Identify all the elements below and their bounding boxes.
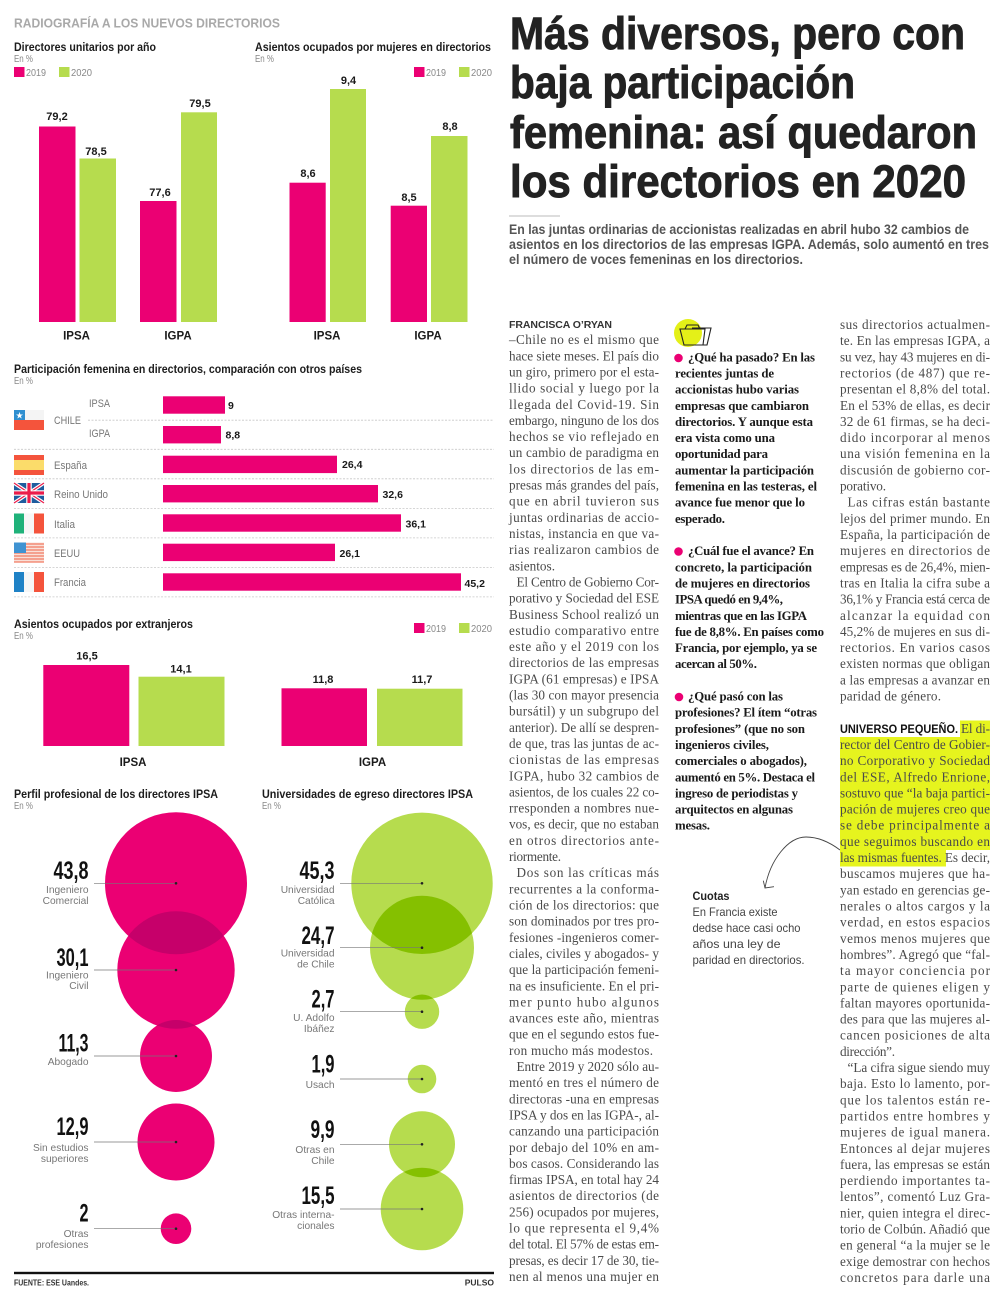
- deck: [509, 222, 989, 267]
- article column 1: asientos, de los cuales 22 co-: [509, 784, 659, 799]
- article column 1: riormente.: [509, 849, 561, 864]
- article column 1: directoras -una en empresas: [509, 1091, 659, 1106]
- value labels: 2: [80, 1200, 88, 1228]
- bar chart: 11,8: [313, 674, 333, 686]
- question: qué ha pasado: ¿Qué ha pasado? En las: [688, 350, 815, 364]
- question: qué ha pasado: era vista como una: [675, 431, 776, 445]
- country labels: Reino Unido: [54, 489, 108, 501]
- flag: Reino Unido: [14, 483, 44, 503]
- value labels: Ingeniero: [46, 970, 89, 982]
- article column 3: cancen posiciones de alta: [840, 1028, 990, 1043]
- article column 1: que la participación femeni-: [509, 962, 659, 977]
- article column 1: presas más grandes del país,: [509, 478, 659, 492]
- bar chart: IGPA: [164, 330, 192, 342]
- article column 3: dido incorporar al menos: [840, 430, 990, 445]
- article column 1: recurrentes a la conforma-: [509, 881, 659, 896]
- article column 3: concretos para darle una: [840, 1270, 990, 1285]
- article column 3: tras en Italia la cifra sube a: [840, 575, 990, 590]
- unit: En %: [262, 801, 281, 812]
- article column 1: firmas IPSA, en total hay 24: [509, 1172, 659, 1187]
- article column 3: alcanzar la equidad con: [840, 608, 990, 623]
- question: qué pasó con las profesiones: ingreso de periodistas y: [675, 786, 799, 800]
- legend: 2019: [426, 67, 446, 79]
- article column 3: rector del Centro de Gobier-: [840, 737, 990, 752]
- article column 3: España, la participación de: [840, 527, 990, 542]
- article column 3: te. En las empresas IGPA, a: [840, 333, 990, 348]
- section heading: Radiografía: RADIOGRAFÍA A LOS NUEVOS DIRECTORIOS: [14, 16, 280, 30]
- question: cuál fue el avance: mientras que en las IGPA: [675, 609, 808, 623]
- legend: 2020: [71, 67, 92, 79]
- article column 1: nen al menos una mujer en: [509, 1269, 659, 1284]
- question: qué ha pasado: femenina en las testeras, el: [675, 480, 817, 494]
- article column 3: del ESE, Alfredo Enrione,: [840, 769, 990, 784]
- callout: cuotas: paridad en directorios.: [692, 953, 804, 967]
- article column 1: anterior). De allí se despren-: [509, 720, 659, 735]
- value labels: Otras interna-: [272, 1210, 334, 1221]
- article column 3: mujeres en directorios de: [840, 543, 990, 558]
- heading: Asientos ocupados por extranjeros: [14, 617, 193, 631]
- article column 1: presas, es decir 17 de 30, tie-: [509, 1253, 659, 1268]
- value labels: Otras en: [295, 1145, 334, 1156]
- value labels: Universidad: [281, 885, 335, 896]
- question: qué ha pasado: esperado.: [675, 512, 725, 526]
- panel: asientos ocupados por extranjeros: [14, 617, 492, 769]
- bar chart: IGPA: [359, 757, 386, 769]
- article column 1: mer punto hubo algunos: [509, 994, 659, 1009]
- bar chart: 8,8: [442, 121, 458, 133]
- article column 1: del total. El 57% de estas em-: [509, 1237, 659, 1252]
- country labels: EEUU: [54, 548, 80, 560]
- unit: En %: [14, 801, 33, 812]
- article column 1: (las 30 con mayor presencia: [509, 688, 659, 702]
- article column 1: 256) ocupados por mujeres,: [509, 1204, 659, 1219]
- value labels: [272, 857, 335, 1232]
- article column 1: hace siete meses. El país dio: [509, 348, 659, 363]
- deck: En las juntas ordinarias de accionistas realizadas en abril hubo 32 cambios de: [509, 222, 969, 237]
- title: [510, 8, 977, 207]
- source footer: FUENTE: ESE Uandes.: [14, 1278, 89, 1288]
- value labels: Civil: [69, 981, 88, 992]
- article column 3: dirección”.: [840, 1044, 895, 1059]
- article column 1: que en abril tuvieron sus: [509, 494, 659, 509]
- value labels: Universidad: [281, 948, 335, 960]
- horizontal bars: 9: [228, 400, 234, 412]
- article column 1: un giro, primero por el esta-: [509, 364, 659, 380]
- value labels: U. Adolfo: [293, 1013, 335, 1024]
- unit: En %: [14, 631, 33, 642]
- article column 1: lo que representa el 9,4%: [509, 1221, 659, 1236]
- legend: 2020: [471, 623, 492, 635]
- article column 3: fuera, las empresas se están: [840, 1157, 990, 1172]
- bar chart: 11,7: [412, 674, 432, 686]
- article column 1: que en el segundo estos fue-: [509, 1027, 659, 1042]
- article column 1: Business School realizó un: [509, 607, 659, 622]
- article column 3: El di-: [961, 721, 990, 736]
- article column 3: no Corporativo y Sociedad: [840, 753, 990, 768]
- bar chart: [290, 75, 468, 342]
- value labels: Ingeniero: [46, 885, 89, 896]
- article column 3: verdad, en estos espacios: [840, 915, 990, 930]
- question: qué pasó con las profesiones: comerciales o abogados),: [675, 754, 807, 768]
- bar chart: 78,5: [85, 146, 107, 158]
- question: qué ha pasado: [674, 350, 817, 526]
- article column 1: en otros directorios ante-: [509, 833, 659, 848]
- article column 1: fesiones -ingenieros comer-: [509, 930, 659, 945]
- article column 1: hechos se vio reflejado en: [509, 429, 659, 444]
- article column 1: asientos de directorios (de: [509, 1188, 659, 1203]
- article column 1: llegada del Covid-19. Sin: [509, 397, 659, 412]
- legend: 2019: [426, 623, 446, 635]
- value labels: 1,9: [312, 1050, 334, 1078]
- bar chart: IPSA: [120, 757, 146, 769]
- article column 3: partidos entre hombres y: [840, 1108, 990, 1124]
- article column 1: –Chile no es el mismo que: [508, 332, 659, 347]
- country labels: IPSA: [89, 398, 111, 410]
- article column 3: yan estado en gerencias ge-: [840, 882, 990, 897]
- article column 1: por debajo del 10% en am-: [509, 1140, 659, 1155]
- article column 3: lejos del primer mundo. En: [840, 511, 990, 526]
- question: qué ha pasado: directorios. Y aunque esta: [675, 415, 814, 429]
- question: qué ha pasado: accionistas hubo varias: [675, 383, 799, 397]
- article column 3: una visión femenina en la: [840, 446, 990, 461]
- article column 3: UNIVERSO PEQUEÑO.: [840, 723, 958, 736]
- question: qué ha pasado: oportunidad para: [675, 447, 769, 461]
- value labels: Abogado: [48, 1057, 89, 1068]
- country labels: Francia: [54, 577, 87, 589]
- value labels: [33, 857, 89, 1251]
- article column 1: canzando una participación: [509, 1124, 659, 1139]
- article column 1: bursátil) y un subgrupo del: [509, 704, 659, 719]
- flag: Chile: ★: [15, 410, 24, 420]
- article column 3: en general “a la mujer se le: [840, 1238, 990, 1253]
- legend: [414, 67, 492, 79]
- article column 3: rectorios. En varios casos: [840, 640, 990, 655]
- article column 3: ta mayor conciencia por: [840, 963, 991, 978]
- callout: cuotas: Cuotas: [692, 891, 730, 903]
- value labels: 30,1: [56, 944, 89, 972]
- article column 3: paridad de género.: [840, 688, 941, 704]
- panel: asientos ocupados por mujeres: [255, 40, 492, 342]
- question: qué pasó con las profesiones: ¿Qué pasó con las: [688, 690, 783, 704]
- article column 3: 45,2% de mujeres en sus di-: [840, 624, 990, 639]
- article column 3: nier, quien integra el direc-: [840, 1205, 990, 1220]
- article column 3: pación de mujeres creo que: [840, 802, 990, 817]
- legend: 2019: [26, 67, 46, 79]
- bar chart: IPSA: [63, 330, 90, 342]
- article column 3: sostuvo que “la baja partici-: [840, 785, 990, 800]
- horizontal bars: 8,8: [226, 430, 240, 442]
- article column 1: rresponden a nombres nue-: [509, 801, 659, 816]
- question: qué ha pasado: aumentar la participación: [675, 463, 814, 477]
- panel: perfil profesional: [14, 787, 247, 1251]
- flag: Italia: [14, 514, 44, 534]
- question: qué pasó con las profesiones: [675, 690, 817, 833]
- article column 1: Entre 2019 y 2020 sólo au-: [516, 1059, 659, 1074]
- flag: EEUU: [14, 542, 44, 562]
- callout: cuotas: En Francia existe: [692, 905, 778, 919]
- article column 3: [840, 317, 991, 1285]
- horizontal bars: [163, 396, 485, 591]
- unit: En %: [14, 54, 33, 65]
- value labels: 9,9: [310, 1116, 334, 1144]
- article column 1: embargo, ninguno de los dos: [509, 413, 659, 428]
- value labels: 43,8: [54, 857, 89, 885]
- bar chart: 8,5: [401, 192, 417, 204]
- bar chart: 14,1: [170, 664, 192, 676]
- highlight: [840, 720, 990, 866]
- question: qué ha pasado: avance fue menor que lo: [675, 496, 805, 510]
- country labels: Italia: [54, 519, 76, 531]
- article column 3: su vez, hay 43 mujeres en di-: [840, 349, 990, 364]
- title: los directorios en 2020: [510, 156, 966, 207]
- article column 3: mujeres de igual manera.: [840, 1125, 990, 1140]
- horizontal bars: 26,1: [340, 548, 360, 560]
- value labels: 24,7: [302, 922, 334, 950]
- question: cuál fue el avance: Francia, por ejemplo, ya se: [675, 641, 817, 655]
- unit: En %: [255, 54, 274, 65]
- country labels: CHILE: [54, 415, 81, 427]
- article column 3: nerales o altos cargos y la: [840, 898, 990, 914]
- article column 3: que seguimos buscando en: [840, 834, 990, 849]
- article column 1: bos casos. Considerando las: [509, 1156, 659, 1171]
- article column 1: avances este año, mientras: [509, 1011, 659, 1026]
- question: cuál fue el avance: de mujeres en directorios: [675, 576, 810, 590]
- article column 1: este año y el 2019 con los: [509, 639, 659, 654]
- article column 1: [508, 319, 659, 1284]
- article column 1: estudio comparativo entre: [509, 623, 659, 638]
- article column 3: des para que las mujeres al-: [840, 1012, 990, 1027]
- flag: España: [14, 455, 44, 475]
- source footer: [14, 1272, 494, 1288]
- bar chart: [39, 98, 217, 342]
- question: cuál fue el avance: ¿Cuál fue el avance? En: [688, 544, 814, 558]
- article column 3: buscamos mujeres que ha-: [840, 866, 990, 881]
- question: qué pasó con las profesiones: profesiones” (que no son: [675, 722, 805, 736]
- article column 3: torio de Colbún. Añadió que: [840, 1222, 990, 1237]
- article column 1: ron mucho más modestos.: [509, 1043, 653, 1058]
- question: qué pasó con las profesiones: aumentó en 5%. Destaca el: [675, 770, 815, 784]
- value labels: 11,3: [58, 1030, 88, 1058]
- article column 3: que los talentos están re-: [840, 1092, 990, 1107]
- heading: Universidades de egreso directores IPSA: [262, 787, 473, 801]
- value labels: Usach: [306, 1080, 334, 1091]
- heading: Asientos ocupados por mujeres en directorios: [255, 40, 491, 54]
- flag: Francia: [14, 572, 44, 592]
- horizontal bars: 36,1: [406, 518, 426, 530]
- legend: [14, 67, 92, 79]
- article column 3: exige demostrar con hechos: [840, 1254, 990, 1269]
- question: qué pasó con las profesiones: arquitectos en algunas: [675, 803, 793, 817]
- callout: cuotas: dedse hace casi ocho: [692, 921, 801, 935]
- article column 3: las mismas fuentes. Es decir,: [840, 850, 990, 865]
- question: cuál fue el avance: concreto, la participación: [675, 560, 812, 574]
- country labels: IGPA: [89, 428, 111, 440]
- article column 1: asientos.: [509, 558, 555, 573]
- bar chart: 9,4: [341, 75, 357, 87]
- value labels: Otras: [64, 1229, 88, 1240]
- article column 3: faltan mayores oportunida-: [840, 995, 990, 1010]
- article column 3: perdiendo importantes ta-: [840, 1173, 990, 1188]
- value labels: profesiones: [36, 1240, 88, 1251]
- callout: cuotas: años una ley de: [692, 937, 781, 951]
- article column 3: vemos menos mujeres que: [840, 931, 990, 946]
- arrow: [763, 837, 840, 888]
- article column 1: llido social y luego por la: [509, 381, 659, 396]
- panel: participación femenina por país: [14, 362, 494, 597]
- article column 1: El Centro de Gobierno Cor-: [516, 574, 659, 589]
- article column 3: sus directorios actualmen-: [840, 317, 990, 332]
- value labels: de Chile: [297, 960, 335, 970]
- callout: cuotas: [692, 891, 804, 967]
- article column 1: vos, es decir, que no estaban: [509, 817, 659, 832]
- article column 3: a las empresas a avanzar en: [840, 672, 990, 687]
- country labels: [54, 398, 111, 589]
- article column 1: porativo y Sociedad del ESE: [509, 591, 659, 606]
- bar chart: [43, 650, 463, 769]
- bar chart: 79,5: [189, 98, 211, 110]
- title: Más diversos, pero con: [510, 8, 965, 59]
- article column 3: En el 53% de ellas, es decir: [840, 398, 991, 413]
- value labels: Comercial: [43, 896, 88, 907]
- question: cuál fue el avance: [674, 544, 824, 671]
- article column 3: porativo.: [840, 478, 886, 494]
- bubble chart: [340, 813, 493, 1250]
- article column 3: hombres”. Agregó que “fal-: [840, 947, 990, 962]
- bar chart: 77,6: [149, 187, 171, 199]
- article column 1: de que, tras las juntas de ac-: [509, 736, 659, 751]
- article column 3: Las cifras están bastante: [848, 495, 990, 510]
- panel: directores unitarios por año: [14, 40, 217, 342]
- article column 3: lentos”, comentó Luz Gra-: [840, 1189, 990, 1204]
- panel: universidades de egreso: [262, 787, 493, 1250]
- value labels: Católica: [298, 896, 335, 907]
- deck: el número de voces femeninas en los directorios.: [509, 252, 803, 267]
- question: qué pasó con las profesiones: mesas.: [675, 819, 710, 833]
- title: femenina: así quedaron: [510, 107, 977, 158]
- flag: Chile: [14, 410, 44, 430]
- article column 1: FRANCISCA O’RYAN: [509, 319, 612, 331]
- bar chart: 8,6: [300, 168, 316, 180]
- question: cuál fue el avance: acercan al 50%.: [675, 657, 757, 671]
- article column 1: los directorios de las em-: [509, 461, 659, 476]
- article column 3: 32 de 61 firmas, se ha deci-: [840, 414, 990, 429]
- article column 3: rectorios (de 487) que re-: [840, 366, 990, 380]
- heading: Participación femenina en directorios, comparación con otros países: [14, 362, 362, 376]
- bubble chart: [94, 812, 247, 1244]
- bar chart: IPSA: [314, 330, 340, 342]
- value labels: 12,9: [56, 1113, 88, 1141]
- horizontal bars: 45,2: [464, 578, 485, 590]
- icon: folder on yellow circle: [674, 319, 711, 347]
- article column 1: IGPA (61 empresas) e IPSA: [509, 671, 659, 686]
- question: qué ha pasado: recientes juntas de: [675, 366, 774, 380]
- question: qué ha pasado: empresas que cambiaron: [675, 399, 809, 413]
- value labels: 2,7: [312, 986, 334, 1014]
- article column 1: son dominados por tres pro-: [509, 914, 659, 929]
- value labels: 45,3: [300, 857, 334, 885]
- value labels: Sin estudios: [33, 1143, 88, 1154]
- value labels: Ibáñez: [304, 1024, 334, 1035]
- article column 1: un cambio de paradigma en: [509, 445, 659, 460]
- article column 3: parte de quienes eligen y: [840, 979, 990, 994]
- article column 1: juntas ordinarias de accio-: [508, 510, 659, 525]
- value labels: Chile: [311, 1156, 335, 1167]
- article column 3: presentan el 8,8% del total.: [840, 382, 990, 397]
- legend: [414, 623, 492, 635]
- bar chart: IGPA: [414, 330, 442, 342]
- question: cuál fue el avance: IPSA quedó en 9,4%,: [675, 593, 783, 607]
- unit: En %: [14, 376, 33, 387]
- heading: Directores unitarios por año: [14, 40, 156, 54]
- article column 1: cionistas de las empresas: [509, 752, 659, 767]
- article column 1: nistas, instancia en que va-: [509, 526, 659, 541]
- article column 3: Entonces al dejar mujeres: [840, 1141, 990, 1156]
- country labels: España: [54, 460, 88, 472]
- article column 1: ción de los directorios: que: [509, 898, 659, 912]
- article column 3: baja. Esto lo lamento, por-: [840, 1076, 990, 1091]
- legend: 2020: [471, 67, 492, 79]
- article column 3: se debe principalmente a: [840, 818, 990, 833]
- article column 3: discusión de gobierno cor-: [840, 462, 990, 477]
- article column 1: directorios de las empresas: [509, 655, 659, 670]
- question: cuál fue el avance: fue de 8,8%. En países como: [675, 625, 824, 639]
- article column 1: ciales, civiles y abogados- y: [509, 946, 659, 961]
- article column 1: rias realizaron cambios de: [509, 542, 659, 557]
- title: baja participación: [510, 57, 855, 108]
- horizontal bars: 32,6: [382, 489, 403, 501]
- article column 3: empresas es de 26,4%, mien-: [840, 559, 990, 574]
- bar chart: 79,2: [46, 111, 68, 123]
- heading: Perfil profesional de los directores IPSA: [14, 787, 218, 801]
- article column 1: na es insuficiente. En el pri-: [509, 978, 659, 993]
- horizontal bars: 26,4: [342, 459, 363, 471]
- article column 1: IGPA, hubo 32 cambios de: [509, 768, 659, 783]
- article column 3: “La cifra sigue siendo muy: [848, 1060, 990, 1075]
- article column 1: mentó en tres el número de: [509, 1075, 659, 1090]
- article column 3: 36,1% y Francia está cerca de: [840, 592, 990, 607]
- article column 1: IPSA y dos en las IGPA-, al-: [509, 1108, 659, 1122]
- question: qué pasó con las profesiones: ingenieros civiles,: [675, 738, 769, 752]
- bar chart: 16,5: [76, 650, 98, 662]
- article column 1: Dos son las críticas más: [516, 865, 659, 880]
- value labels: superiores: [41, 1154, 88, 1165]
- sidebar column: questions: [674, 350, 824, 833]
- source footer: PULSO: [465, 1278, 494, 1288]
- question: qué pasó con las profesiones: profesiones? El ítem “otras: [675, 706, 817, 720]
- value labels: cionales: [297, 1221, 334, 1232]
- article column 3: existen normas que obligan: [840, 656, 990, 671]
- value labels: 15,5: [302, 1182, 335, 1210]
